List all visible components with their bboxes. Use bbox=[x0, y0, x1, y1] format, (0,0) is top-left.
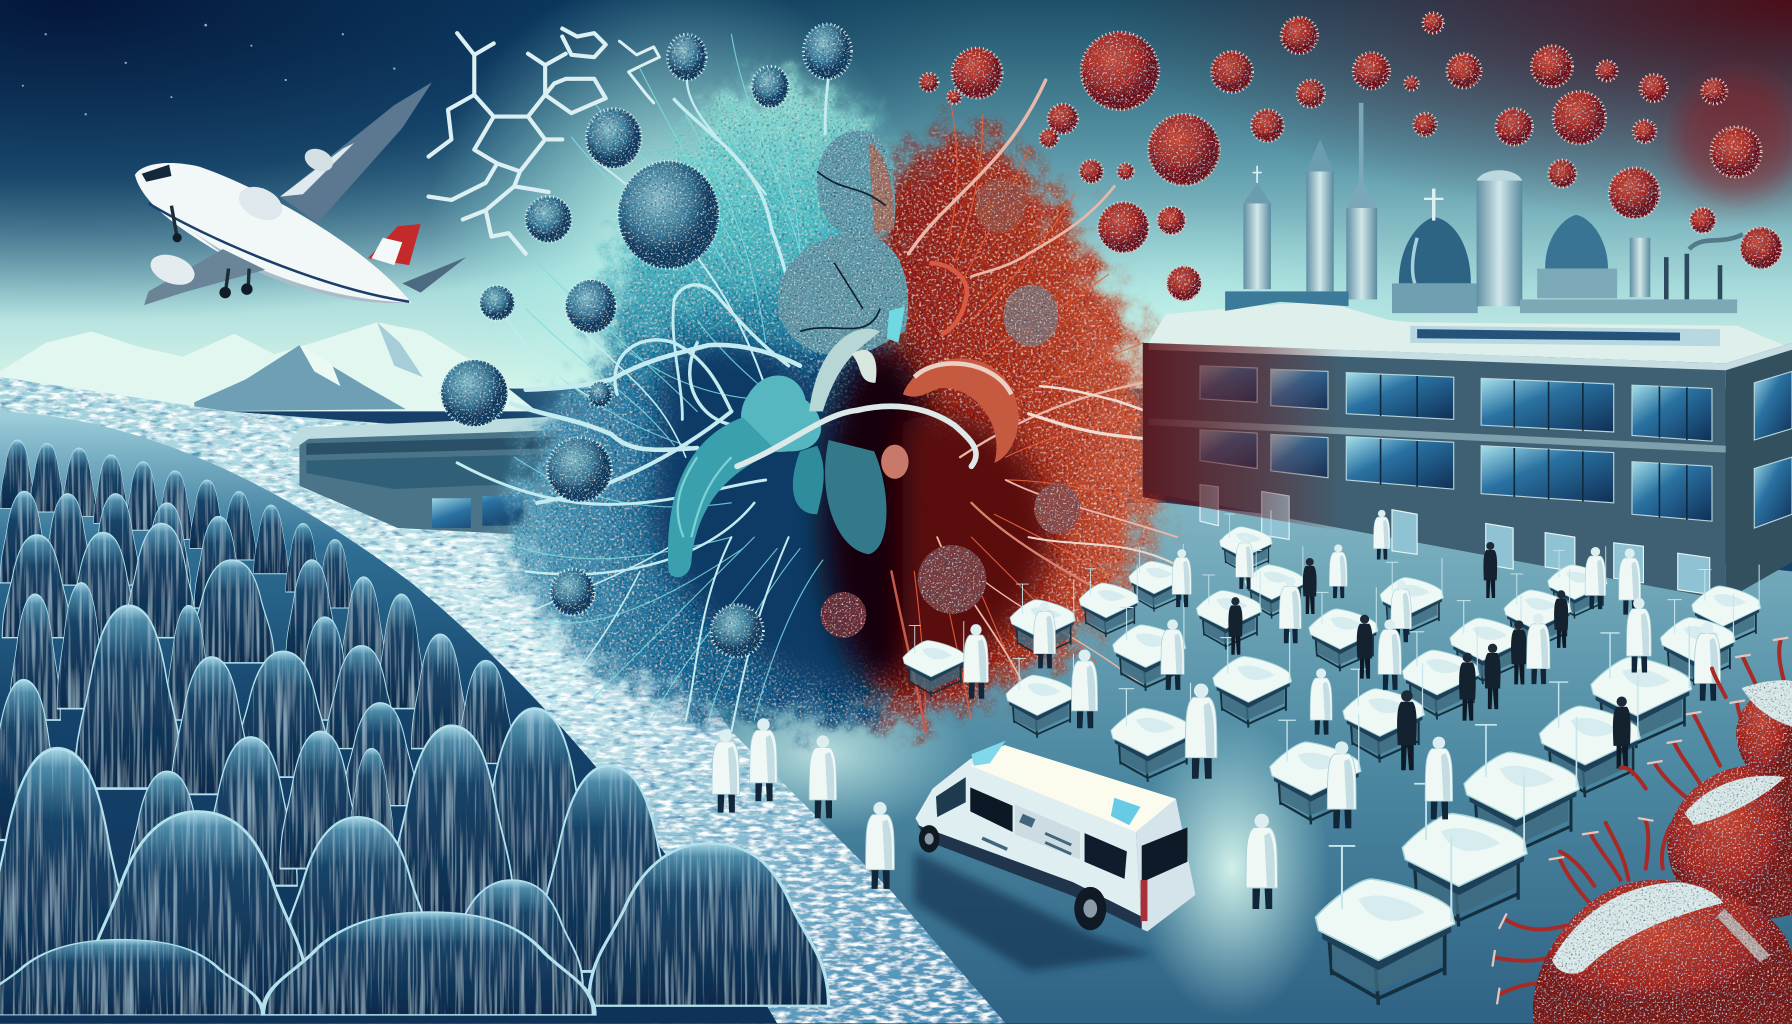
small background building bbox=[286, 416, 571, 537]
lump cracks bbox=[800, 171, 886, 331]
blue branches bbox=[457, 77, 829, 731]
hospital beds bbox=[903, 510, 1761, 1005]
virus bodies bbox=[1533, 680, 1792, 1023]
facade bbox=[1143, 343, 1726, 600]
hooded crowd bbox=[0, 440, 829, 1015]
hospital building bbox=[1143, 291, 1792, 600]
embedded spores on red side bbox=[821, 178, 1080, 638]
red branches bbox=[891, 80, 1189, 731]
dark red core bbox=[903, 414, 1052, 686]
pathogen mass bbox=[429, 0, 1189, 731]
roof bbox=[1149, 302, 1792, 363]
dark center bbox=[823, 343, 942, 686]
ambulance bbox=[915, 741, 1195, 931]
window mullions bbox=[1381, 375, 1687, 520]
lump crystal bbox=[887, 306, 905, 343]
mountains bbox=[0, 322, 537, 411]
fine red branches bbox=[914, 91, 1166, 731]
ground floor doors bbox=[1200, 485, 1710, 594]
lower tentacle lumps bbox=[668, 329, 1019, 577]
medical staff bbox=[712, 510, 1720, 909]
red reflection bbox=[1143, 343, 1343, 531]
airplane bbox=[135, 82, 466, 305]
red virus particles bbox=[920, 13, 1782, 301]
blue spores bbox=[441, 24, 851, 657]
teal upper bbox=[611, 79, 880, 375]
spike tips bbox=[1493, 638, 1787, 1003]
central blue lump bbox=[777, 131, 908, 355]
virus cluster bottom right bbox=[1493, 638, 1792, 1023]
spikes bbox=[1495, 640, 1785, 994]
floor bbox=[491, 503, 1792, 1023]
pale glow bbox=[429, 0, 920, 486]
fine blue branches bbox=[491, 34, 851, 720]
skyline towers and domes bbox=[1243, 103, 1743, 313]
windows bbox=[1200, 366, 1792, 528]
sky background bbox=[0, 0, 1792, 411]
molecule structure bbox=[429, 29, 659, 254]
red mass bbox=[880, 136, 1157, 720]
blue mass bbox=[513, 283, 880, 720]
snowy field bbox=[0, 377, 1006, 1023]
dark blue core bbox=[651, 341, 869, 697]
